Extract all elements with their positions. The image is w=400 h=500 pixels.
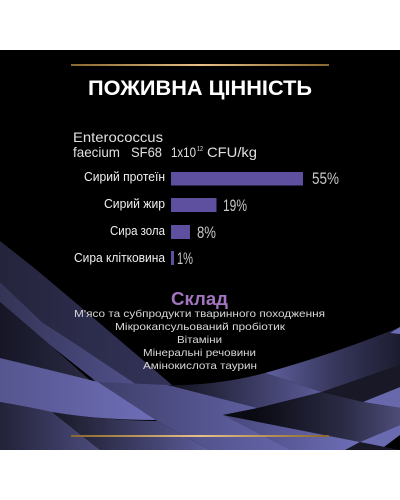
bar chart: [74, 169, 339, 268]
top gold divider: [71, 64, 329, 66]
row: crude protein: Сирий протеїн: [84, 169, 165, 184]
composition list: Вітаміни: [177, 334, 222, 346]
row: crude protein: 55%: [312, 169, 339, 188]
row: crude fibre: 1%: [177, 249, 193, 268]
composition list: М'ясо та субпродукти тваринного походження: [74, 308, 325, 320]
composition list: Мікрокапсульований пробіотик: [115, 321, 285, 333]
black background panel: [0, 50, 400, 450]
row: crude protein: [84, 169, 339, 188]
probiotic text block: SF68: [131, 144, 162, 160]
composition list: Амінокислота таурин: [143, 360, 257, 372]
probiotic text block: 1x10: [171, 144, 196, 160]
probiotic text block: faecium: [73, 144, 120, 160]
probiotic text block: [73, 129, 257, 160]
probiotic text block: CFU/kg: [207, 144, 257, 160]
row: crude fibre: Сира клітковина: [74, 250, 166, 265]
composition list: [74, 308, 325, 372]
row: crude ash: 8%: [197, 223, 216, 242]
row: crude fat: 19%: [223, 196, 247, 215]
title: ПОЖИВНА ЦІННІСТЬ: [88, 77, 312, 100]
decorative ribbons: [0, 241, 400, 450]
row: crude fat: Сирий жир: [104, 196, 165, 211]
row: crude fibre: [74, 249, 193, 268]
row: crude fat: [104, 196, 247, 215]
bottom gold divider: [71, 435, 329, 437]
probiotic text block: Enterococcus: [73, 129, 163, 145]
row: crude ash: Сира зола: [110, 223, 166, 238]
composition heading: Склад: [171, 289, 229, 309]
probiotic text block: 12: [197, 146, 203, 153]
composition list: Мінеральні речовини: [143, 347, 256, 359]
row: crude ash: [110, 223, 216, 242]
